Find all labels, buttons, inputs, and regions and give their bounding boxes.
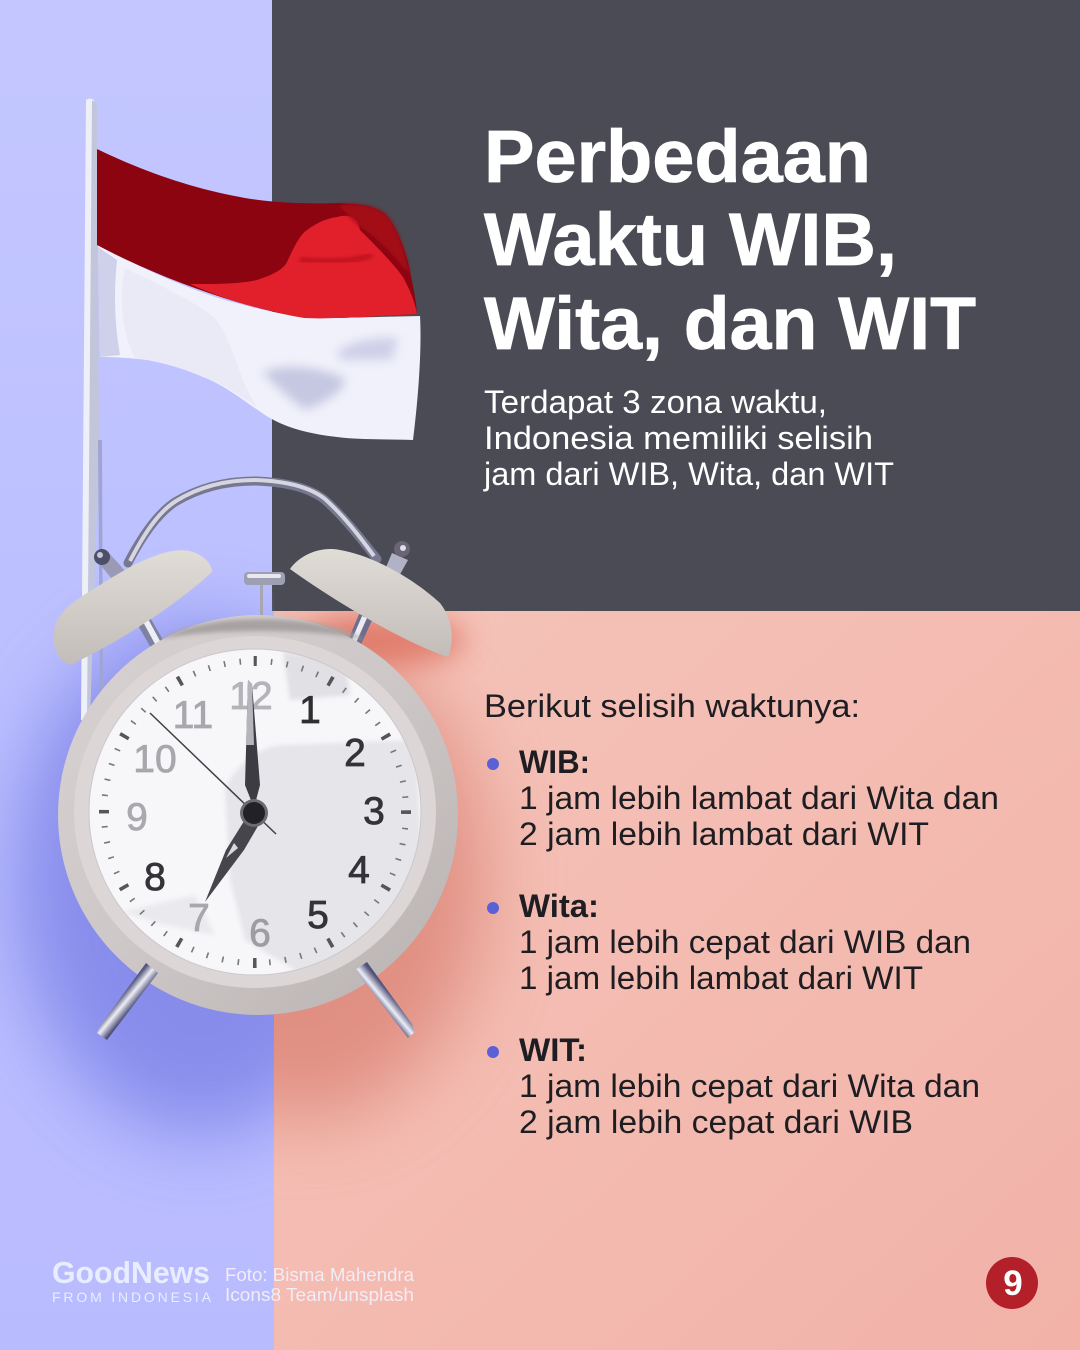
clock hammer [244,572,285,628]
list item: Wita: 1 jam lebih lambat dari WIT [519,960,923,996]
list item: WIT: 2 jam lebih cepat dari WIB [519,1104,913,1140]
flag red stripe [97,149,417,318]
photo credit: Icons8 Team/unsplash [225,1285,414,1305]
background: lavender panel [0,0,275,1350]
clock hub [240,799,268,827]
clock rim [74,636,436,988]
clock numerals: 12 [229,675,273,718]
list item: WIT: WIT: [519,1032,587,1068]
page number badge: 9 [1003,1264,1023,1303]
clock shadow on lavender [0,588,274,1168]
title: Wita, dan WIT [484,282,976,365]
clock numerals: 7 [188,897,210,940]
clock numerals: 6 [249,912,271,955]
clock numerals [126,675,385,955]
list item: WIB: WIB: [519,744,590,780]
clock numerals: 11 [173,694,213,737]
list item: WIB: 2 jam lebih lambat dari WIT [519,816,929,852]
logo: GoodNews [52,1255,212,1305]
photo credit: Foto: Bisma Mahendra [225,1265,415,1285]
clock numerals: 8 [144,856,166,899]
clock numerals: 2 [344,732,366,775]
clock pin left [94,549,128,584]
background: dark panel [272,0,1080,611]
clock legs [97,962,415,1040]
title: Perbedaan [484,115,871,198]
subtitle: jam dari WIB, Wita, dan WIT [483,456,894,492]
clock bell posts [136,612,373,660]
title: Waktu WIB, [484,198,897,281]
page number badge [986,1257,1038,1309]
subtitle: Indonesia memiliki selisih [484,420,873,456]
bullet [487,902,499,914]
list item: WIT [487,1032,980,1140]
background: pink panel [274,611,1080,1350]
flag: Indonesia [97,149,421,440]
photo credit [225,1265,415,1305]
clock handle [128,481,377,563]
clock face [89,649,421,975]
list item: WIB: 1 jam lebih lambat dari Wita dan [519,780,999,816]
clock minute hand [245,680,260,808]
clock numerals: 9 [126,796,148,839]
clock face reflection [122,652,425,985]
flag pole [81,98,103,720]
list item: Wita: Wita: [519,888,599,924]
clock minute ticks [104,661,406,963]
list item: Wita: 1 jam lebih cepat dari WIB dan [519,924,971,960]
clock bell left [54,550,212,665]
list item: Wita [487,888,971,996]
clock numerals: 1 [299,689,321,732]
clock hour ticks [104,661,406,963]
flag white stripe [98,245,421,440]
clock pin right [384,541,410,578]
subtitle [483,384,894,492]
clock case [58,615,458,1015]
bullet [487,758,499,770]
alarm clock [54,480,458,1040]
clock bell right [290,549,452,657]
clock numerals: 5 [307,894,329,937]
clock hour hand [205,818,258,902]
list item: WIT: 1 jam lebih cepat dari Wita dan [519,1068,980,1104]
list item: WIB [487,744,999,852]
clock numerals: 4 [348,849,370,892]
title [484,115,976,365]
clock numerals: 3 [363,790,385,833]
subtitle: Terdapat 3 zona waktu, [484,384,827,420]
clock numerals: 10 [133,738,177,781]
clock shadow on pink [274,611,520,1154]
bullet [487,1046,499,1058]
logo: GoodNews: FROM INDONESIA [52,1289,212,1305]
intro text: Berikut selisih waktunya: [484,688,860,724]
logo: GoodNews: GoodNews [52,1255,210,1290]
clock second hand [150,713,276,834]
